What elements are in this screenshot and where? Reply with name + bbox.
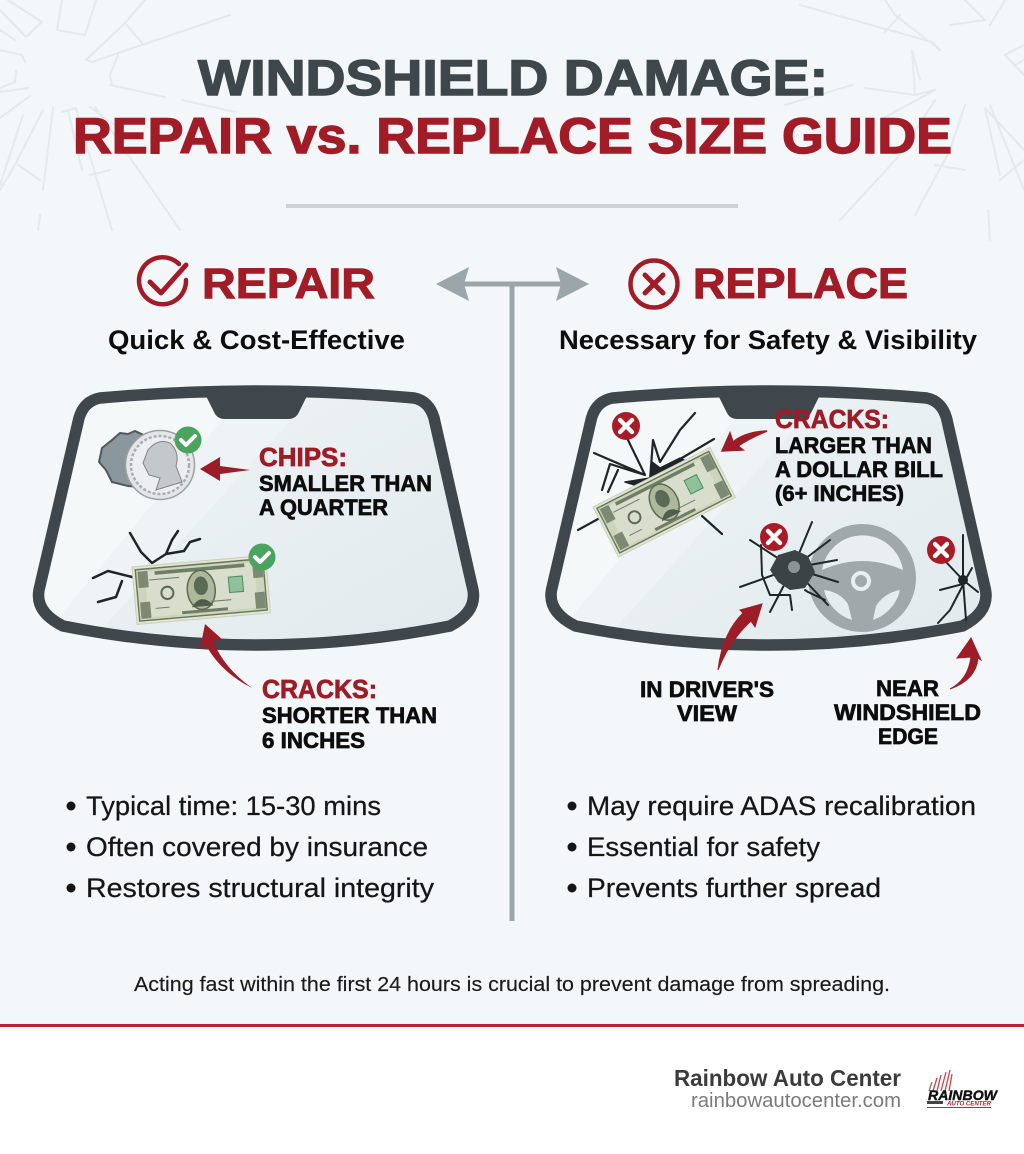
repair bullet list: Restores structural integrity bbox=[86, 873, 435, 903]
background shattered glass top-right bbox=[785, 0, 1024, 240]
small cracks bbox=[93, 531, 200, 602]
replace heading: REPLACE bbox=[693, 260, 908, 308]
label: large cracks bbox=[775, 406, 943, 506]
label: cracks: SHORTER THAN bbox=[262, 703, 437, 728]
label: large cracks: (6+ INCHES) bbox=[775, 481, 904, 506]
large crack bbox=[578, 413, 722, 534]
icon: check badge bbox=[248, 544, 276, 570]
footer brand text bbox=[674, 1065, 901, 1112]
repair bullet list: Typical time: 15-30 mins bbox=[86, 791, 381, 821]
chip damage and quarter bbox=[99, 430, 194, 500]
label: in driver's view bbox=[640, 677, 774, 726]
edge crack bbox=[938, 535, 978, 623]
label: large cracks: A DOLLAR BILL bbox=[775, 457, 943, 482]
label: in driver's view: IN DRIVER'S bbox=[640, 677, 774, 702]
icon: check badge bbox=[174, 426, 202, 454]
arrow to large crack bbox=[722, 431, 767, 451]
footer band bbox=[0, 1024, 1024, 1154]
replace bullet list: May require ADAS recalibration bbox=[587, 791, 976, 821]
label: cracks: CRACKS: bbox=[262, 676, 377, 704]
label: cracks: 6 INCHES bbox=[262, 728, 365, 753]
arrow to driver's view bbox=[718, 604, 762, 670]
replace subheading: Necessary for Safety & Visibility bbox=[559, 325, 977, 355]
impact crack bbox=[740, 522, 838, 612]
repair heading bbox=[139, 257, 375, 308]
panel: repair bbox=[38, 257, 474, 903]
label: chips bbox=[259, 444, 432, 520]
footer brand text: Rainbow Auto Center bbox=[674, 1065, 901, 1091]
steering wheel bbox=[808, 524, 916, 632]
label: near windshield edge: WINDSHIELD bbox=[834, 700, 981, 725]
title: REPAIR vs. REPLACE SIZE GUIDE bbox=[73, 108, 952, 164]
dollar bill bbox=[132, 555, 271, 624]
label: chips: CHIPS: bbox=[259, 444, 347, 472]
icon: x badge bbox=[612, 412, 640, 440]
label: chips: SMALLER THAN bbox=[259, 471, 432, 496]
icon: x circle bbox=[630, 260, 678, 308]
icon: x badge bbox=[927, 536, 955, 564]
label: chips: A QUARTER bbox=[259, 495, 388, 520]
replace bullet list: Essential for safety bbox=[587, 832, 821, 862]
label: near windshield edge bbox=[834, 676, 981, 749]
label: in driver's view: VIEW bbox=[677, 701, 738, 726]
repair bullet list bbox=[66, 791, 435, 903]
footnote: Acting fast within the first 24 hours is crucial to prevent damage from spreading. bbox=[134, 974, 890, 996]
replace bullet list bbox=[568, 791, 976, 903]
replace bullet list: Prevents further spread bbox=[587, 873, 881, 903]
label: near windshield edge: EDGE bbox=[878, 724, 938, 749]
arrow to chips bbox=[200, 457, 250, 481]
label: near windshield edge: NEAR bbox=[876, 676, 939, 701]
repair heading: REPAIR bbox=[202, 260, 375, 308]
label: cracks bbox=[262, 676, 437, 753]
title divider bbox=[286, 204, 738, 208]
center double arrow and divider bbox=[436, 267, 589, 921]
repair bullet list: Often covered by insurance bbox=[86, 832, 428, 862]
title: WINDSHIELD DAMAGE: bbox=[198, 50, 828, 106]
label: large cracks: CRACKS: bbox=[775, 406, 889, 434]
logo: rainbow auto center bbox=[927, 1070, 998, 1108]
icon: x badge bbox=[760, 523, 788, 551]
background shattered glass top-left bbox=[0, 0, 235, 230]
icon: check circle bbox=[139, 257, 186, 304]
label: large cracks: LARGER THAN bbox=[775, 433, 932, 458]
arrow to small crack bbox=[200, 624, 252, 688]
dollar bill tilted bbox=[593, 447, 735, 557]
panel: replace bbox=[551, 260, 986, 903]
repair subheading: Quick & Cost-Effective bbox=[108, 325, 405, 355]
logo: rainbow auto center: RAINBOW bbox=[928, 1088, 998, 1103]
windshield: replace bbox=[551, 391, 986, 645]
title bbox=[73, 50, 952, 164]
footer brand text: rainbowautocenter.com bbox=[691, 1090, 901, 1112]
windshield: repair bbox=[38, 391, 474, 645]
arrow to edge bbox=[950, 638, 981, 689]
logo: rainbow auto center: AUTO CENTER bbox=[946, 1102, 992, 1108]
